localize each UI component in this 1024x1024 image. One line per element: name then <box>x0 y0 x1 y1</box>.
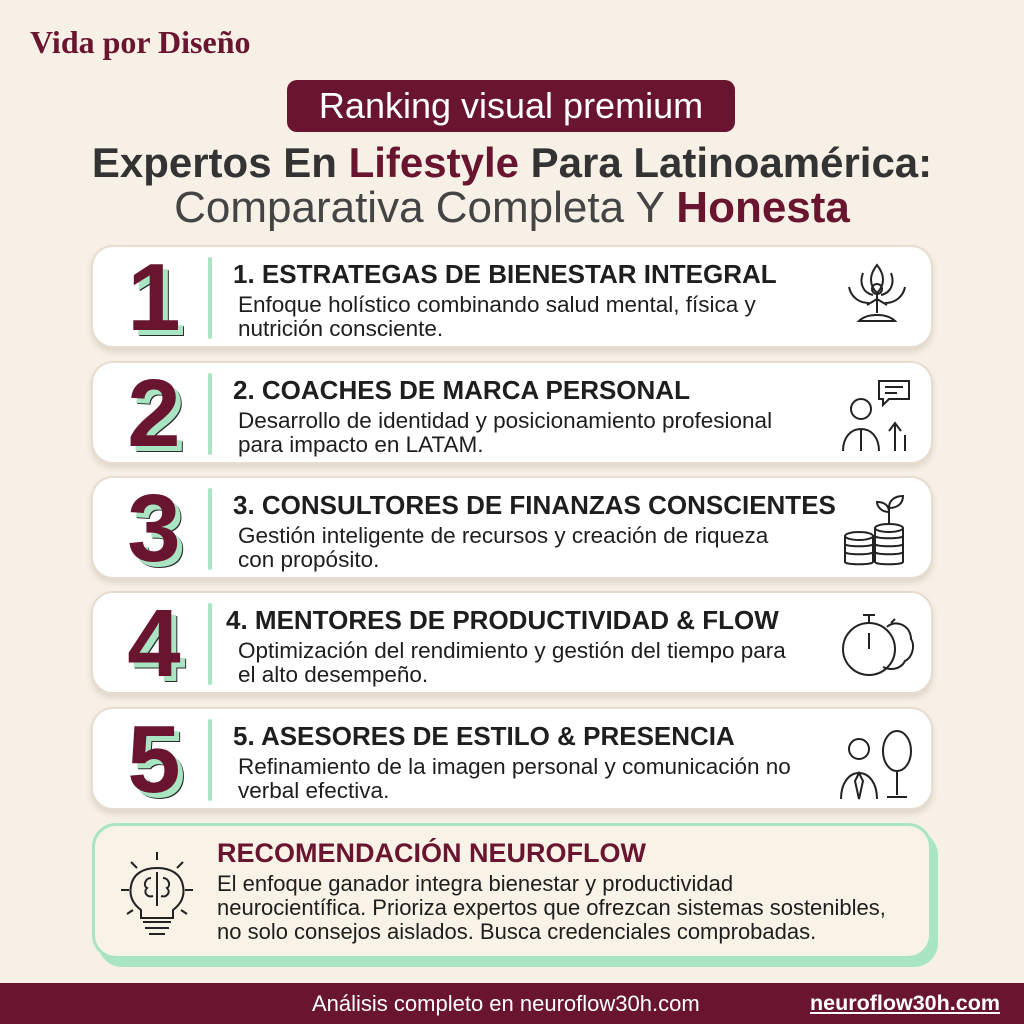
icon: coins with plant <box>844 495 904 566</box>
card 2: Desarrollo de identidad y posicionamiento profesional <box>238 408 772 433</box>
card 4: el alto desempeño. <box>238 662 428 687</box>
pill label <box>287 80 735 132</box>
card 5: Refinamiento de la imagen personal y comunicación no <box>238 754 791 779</box>
card 1: Enfoque holístico combinando salud mental, física y <box>238 292 756 317</box>
icon: person with mirror <box>840 730 912 800</box>
icon: stopwatch brain <box>842 614 914 676</box>
main heading: Comparativa Completa Y Honesta <box>174 183 850 232</box>
card 5: 5 <box>127 706 181 813</box>
card 2: 2. COACHES DE MARCA PERSONAL <box>233 375 690 405</box>
brand title: Vida por Diseño <box>30 24 250 60</box>
card 1: 1. ESTRATEGAS DE BIENESTAR INTEGRAL <box>233 259 777 289</box>
icon: meditation <box>848 264 906 322</box>
card 2: 2 <box>127 360 181 467</box>
card 1 <box>91 245 933 348</box>
recommendation text: El enfoque ganador integra bienestar y productividad <box>217 871 733 896</box>
recommendation text: no solo consejos aislados. Busca credenciales comprobadas. <box>217 919 816 944</box>
footer bar <box>0 983 1024 1024</box>
card 3: 3 <box>127 475 181 582</box>
card 5 <box>91 707 933 810</box>
card 1: 1 <box>127 244 181 351</box>
recommendation box <box>92 823 932 959</box>
card 4: Optimización del rendimiento y gestión del tiempo para <box>238 638 786 663</box>
card 2 <box>91 361 933 464</box>
card 3: con propósito. <box>238 547 379 572</box>
card 4: 4. MENTORES DE PRODUCTIVIDAD & FLOW <box>226 605 779 635</box>
main heading <box>92 139 932 232</box>
pill label: Ranking visual premium <box>319 85 703 126</box>
card 3 <box>91 476 933 579</box>
card 4 <box>91 591 933 694</box>
card 4: 4 <box>127 590 181 697</box>
icon: lightbulb brain <box>121 852 193 935</box>
footer bar: neuroflow30h.com <box>810 991 1000 1015</box>
recommendation text: neurocientífica. Prioriza expertos que ofrezcan sistemas sostenibles, <box>217 895 886 920</box>
card 3: Gestión inteligente de recursos y creación de riqueza <box>238 523 768 548</box>
card 2: para impacto en LATAM. <box>238 432 484 457</box>
card 5: verbal efectiva. <box>238 778 389 803</box>
recommendation text <box>217 871 886 944</box>
icon: person with chart <box>842 380 910 451</box>
recommendation title: RECOMENDACIÓN NEUROFLOW <box>217 838 646 868</box>
card 5: 5. ASESORES DE ESTILO & PRESENCIA <box>233 721 735 751</box>
main heading: Expertos En Lifestyle Para Latinoamérica: <box>92 139 932 186</box>
card 3: 3. CONSULTORES DE FINANZAS CONSCIENTES <box>233 490 836 520</box>
card 1: nutrición consciente. <box>238 316 443 341</box>
footer bar: Análisis completo en neuroflow30h.com <box>312 991 700 1016</box>
